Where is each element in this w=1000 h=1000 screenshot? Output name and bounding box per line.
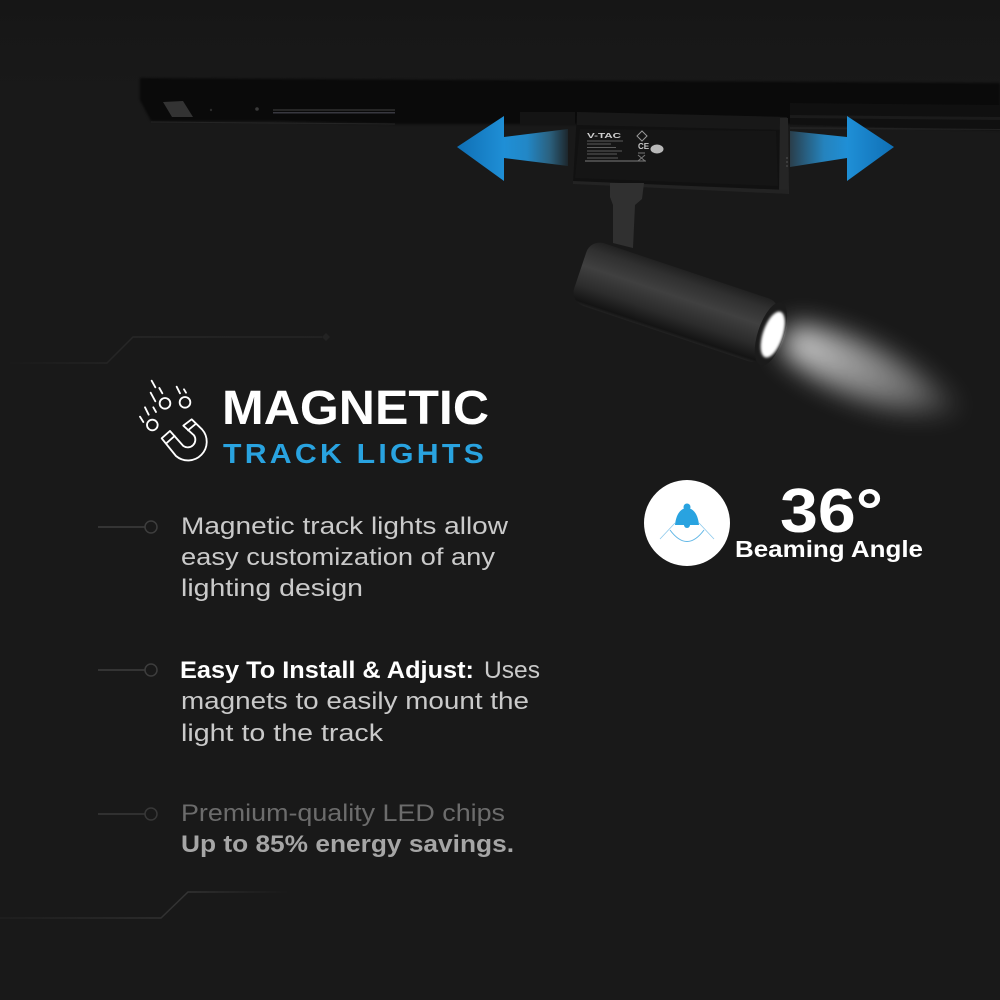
bullet 2 marker bbox=[98, 664, 157, 676]
track adapter module bbox=[573, 112, 789, 194]
heading bbox=[140, 381, 489, 469]
light beam bbox=[780, 324, 962, 412]
arrow: right bbox=[790, 116, 894, 181]
spotlight front rim bbox=[748, 298, 794, 369]
title: magnetic: MAGNETIC bbox=[222, 382, 489, 435]
beam angle badge bbox=[644, 477, 923, 566]
light stem bbox=[610, 183, 644, 248]
spotlight body bbox=[570, 239, 794, 369]
rail slot bbox=[210, 107, 395, 114]
bullet 1 text bbox=[181, 513, 509, 602]
bullet 2 text: light to the track bbox=[181, 720, 384, 747]
angle value: 36° bbox=[780, 477, 883, 546]
top shading bbox=[0, 0, 1000, 90]
circuit line: top bbox=[10, 333, 330, 363]
bullet 2 text: magnets to easily mount the bbox=[181, 688, 529, 715]
track rail bbox=[140, 78, 1000, 130]
bullet 1 text: Magnetic track lights allow bbox=[181, 513, 509, 540]
icon: lamp bbox=[660, 504, 714, 542]
angle label: Beaming Angle bbox=[735, 536, 923, 562]
circuit line: bottom bbox=[0, 892, 290, 918]
bullet 1 marker bbox=[98, 521, 157, 533]
bullet 1 text: easy customization of any bbox=[181, 544, 495, 571]
bullet 2 text: Easy To Install & Adjust: bbox=[180, 657, 474, 684]
arrow: left bbox=[457, 116, 568, 181]
rail label patch bbox=[163, 101, 193, 117]
bullet 3 text: Premium-quality LED chips bbox=[181, 800, 505, 827]
icon: magnet bbox=[140, 381, 207, 460]
title: track lights: TRACK LIGHTS bbox=[223, 438, 487, 469]
module label: CE bbox=[638, 142, 650, 151]
icon: beam angle circle bbox=[644, 480, 730, 566]
bullet 3 marker bbox=[98, 808, 157, 820]
module label bbox=[585, 131, 664, 161]
bullet 1 text: lighting design bbox=[181, 575, 363, 602]
bullet 2 text: Uses bbox=[484, 657, 540, 684]
bullet 3 text: Up to 85% energy savings. bbox=[181, 831, 514, 858]
module label: V-TAC bbox=[587, 133, 621, 140]
bullet 2 text bbox=[180, 657, 540, 747]
spotlight lens bbox=[756, 309, 790, 360]
bullet 3 text bbox=[181, 800, 514, 858]
